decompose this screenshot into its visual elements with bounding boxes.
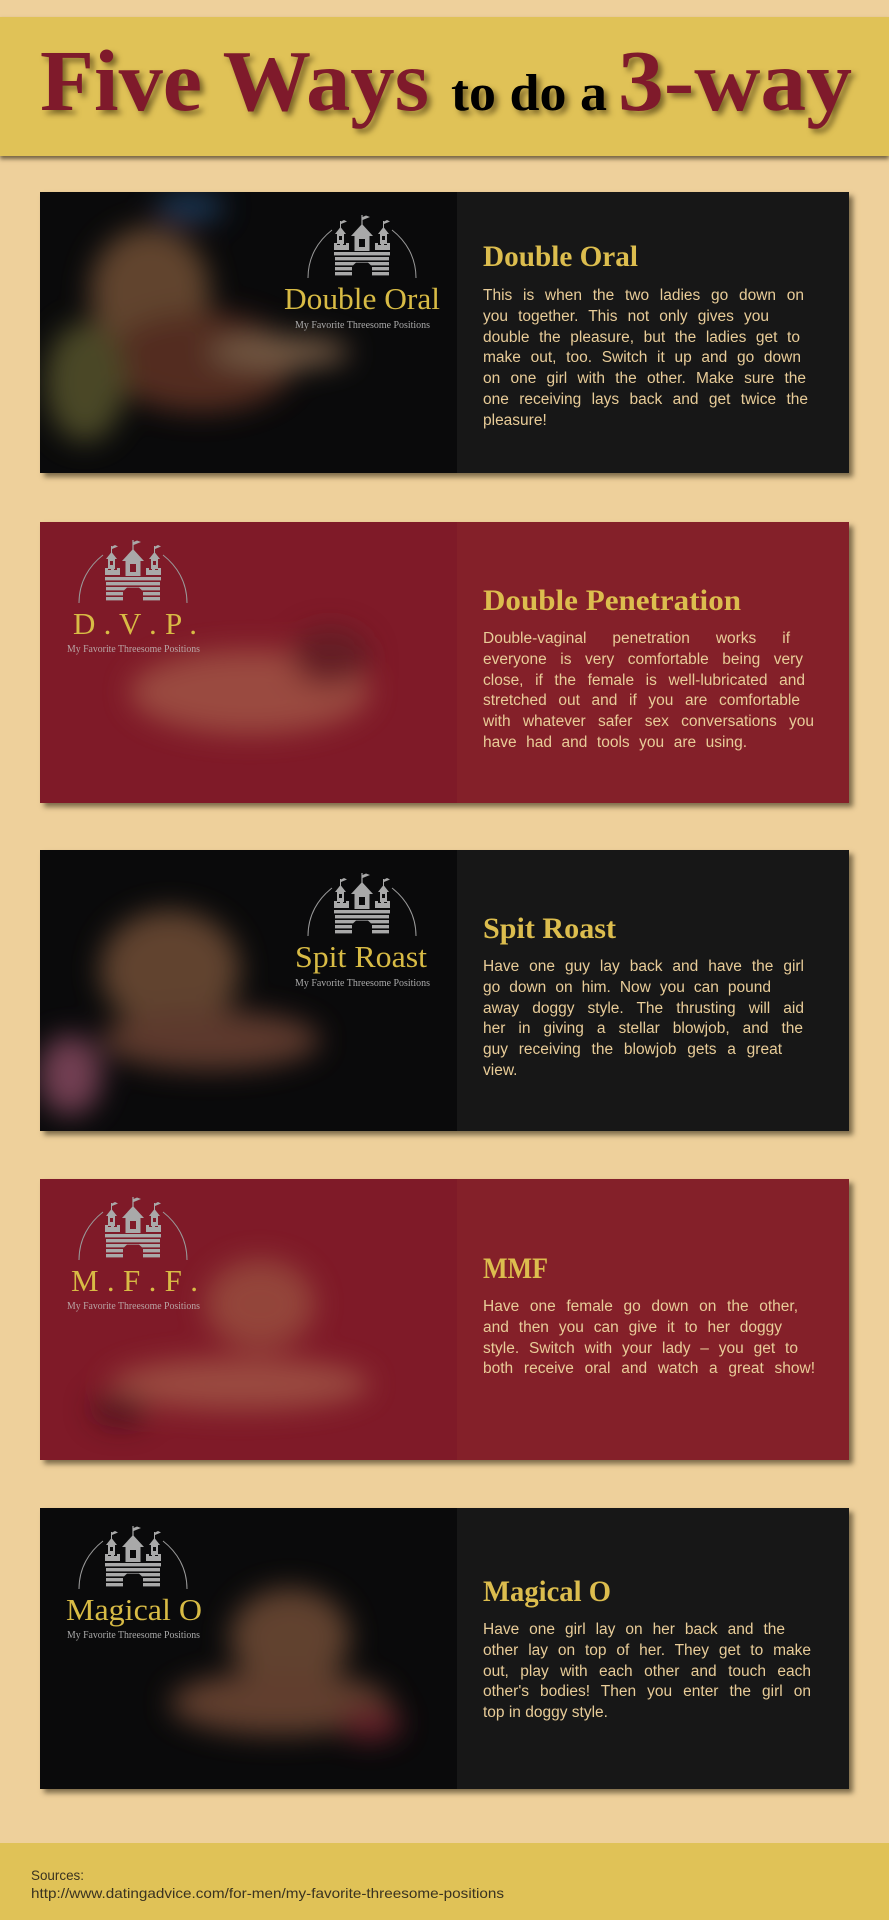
body text: Have one female go down on the other, [483, 1298, 798, 1315]
body text: Double-vaginal penetration works if [483, 630, 790, 647]
panel: Spit Roast [40, 850, 849, 1131]
body text: go down on him. Now you can pound [483, 979, 771, 996]
text column [457, 522, 849, 803]
body text: other lay on top of her. They get to make [483, 1642, 811, 1659]
body text: with whatever safer sex conversations you [483, 713, 814, 730]
body text: close, if the female is well-lubricated and [483, 672, 805, 689]
text column [457, 1508, 849, 1789]
heading: MMF [483, 1252, 548, 1285]
heading: Double Penetration [483, 584, 741, 617]
body text: out, play with each other and touch each [483, 1663, 811, 1680]
body text: her in giving a stellar blowjob, and the [483, 1020, 803, 1037]
body text: you together. This not only gives you [483, 308, 769, 325]
body text: both receive oral and watch a great show! [483, 1360, 815, 1377]
body text [483, 1621, 811, 1721]
title: to do a [451, 65, 607, 122]
photo area with logo [67, 1197, 374, 1438]
footer band with sources [0, 1843, 889, 1920]
body text [483, 1298, 815, 1377]
photo area with logo: My Favorite Threesome Positions [67, 1629, 200, 1641]
panel: Double Oral [40, 192, 849, 473]
body text [483, 630, 814, 751]
body text: Have one guy lay back and have the girl [483, 958, 804, 975]
sources text: http://www.datingadvice.com/for-men/my-favorite-threesome-positions [31, 1885, 504, 1901]
photo area with logo [66, 1526, 414, 1756]
body text: make out, too. Switch it up and go down [483, 349, 801, 366]
body text: away doggy style. The thrusting will aid [483, 1000, 804, 1017]
title: Five Ways [40, 32, 429, 129]
header banner [0, 17, 889, 156]
panel: Double Penetration [40, 522, 849, 803]
body text: stretched out and if you are comfortable [483, 692, 800, 709]
body text [483, 287, 808, 429]
photo area with logo: Spit Roast [295, 939, 427, 974]
photo area with logo [40, 873, 430, 1130]
title: 3-way [618, 32, 852, 129]
panel: Magical O [40, 1508, 849, 1789]
photo area with logo: Double Oral [284, 281, 440, 316]
body text: one receiving lays back and get twice the [483, 391, 808, 408]
sources text: Sources: [31, 1867, 84, 1883]
text column [457, 192, 849, 473]
photo area with logo [67, 540, 378, 746]
body text: view. [483, 1062, 517, 1079]
body text: have had and tools you are using. [483, 734, 747, 751]
body text: double the pleasure, but the ladies get to [483, 329, 800, 346]
text column [457, 1179, 849, 1460]
body text: top in doggy style. [483, 1704, 608, 1721]
title [40, 32, 858, 136]
text column [457, 850, 849, 1131]
heading: Spit Roast [483, 912, 616, 945]
body text: pleasure! [483, 412, 547, 429]
photo area with logo: M . F . F . [71, 1263, 198, 1298]
heading: Magical O [483, 1575, 611, 1608]
sources text [31, 1867, 504, 1901]
body text: other's bodies! Then you enter the girl on [483, 1683, 811, 1700]
heading: Double Oral [483, 240, 638, 273]
body text [483, 958, 804, 1079]
photo area with logo: My Favorite Threesome Positions [67, 643, 200, 655]
body text: everyone is very comfortable being very [483, 651, 803, 668]
photo area with logo: D . V . P . [73, 606, 197, 641]
body text: guy receiving the blowjob gets a great [483, 1041, 782, 1058]
photo area with logo: My Favorite Threesome Positions [295, 977, 430, 989]
body text: on one girl with the other. Make sure the [483, 370, 806, 387]
body text: and then you can give it to her doggy [483, 1319, 782, 1336]
body text: This is when the two ladies go down on [483, 287, 804, 304]
panel: MMF [40, 1179, 849, 1460]
photo area with logo: My Favorite Threesome Positions [295, 319, 430, 331]
body text: Have one girl lay on her back and the [483, 1621, 785, 1638]
photo area with logo: My Favorite Threesome Positions [67, 1300, 200, 1312]
photo area with logo [40, 192, 440, 454]
photo area with logo: Magical O [66, 1592, 202, 1627]
body text: style. Switch with your lady – you get to [483, 1340, 798, 1357]
